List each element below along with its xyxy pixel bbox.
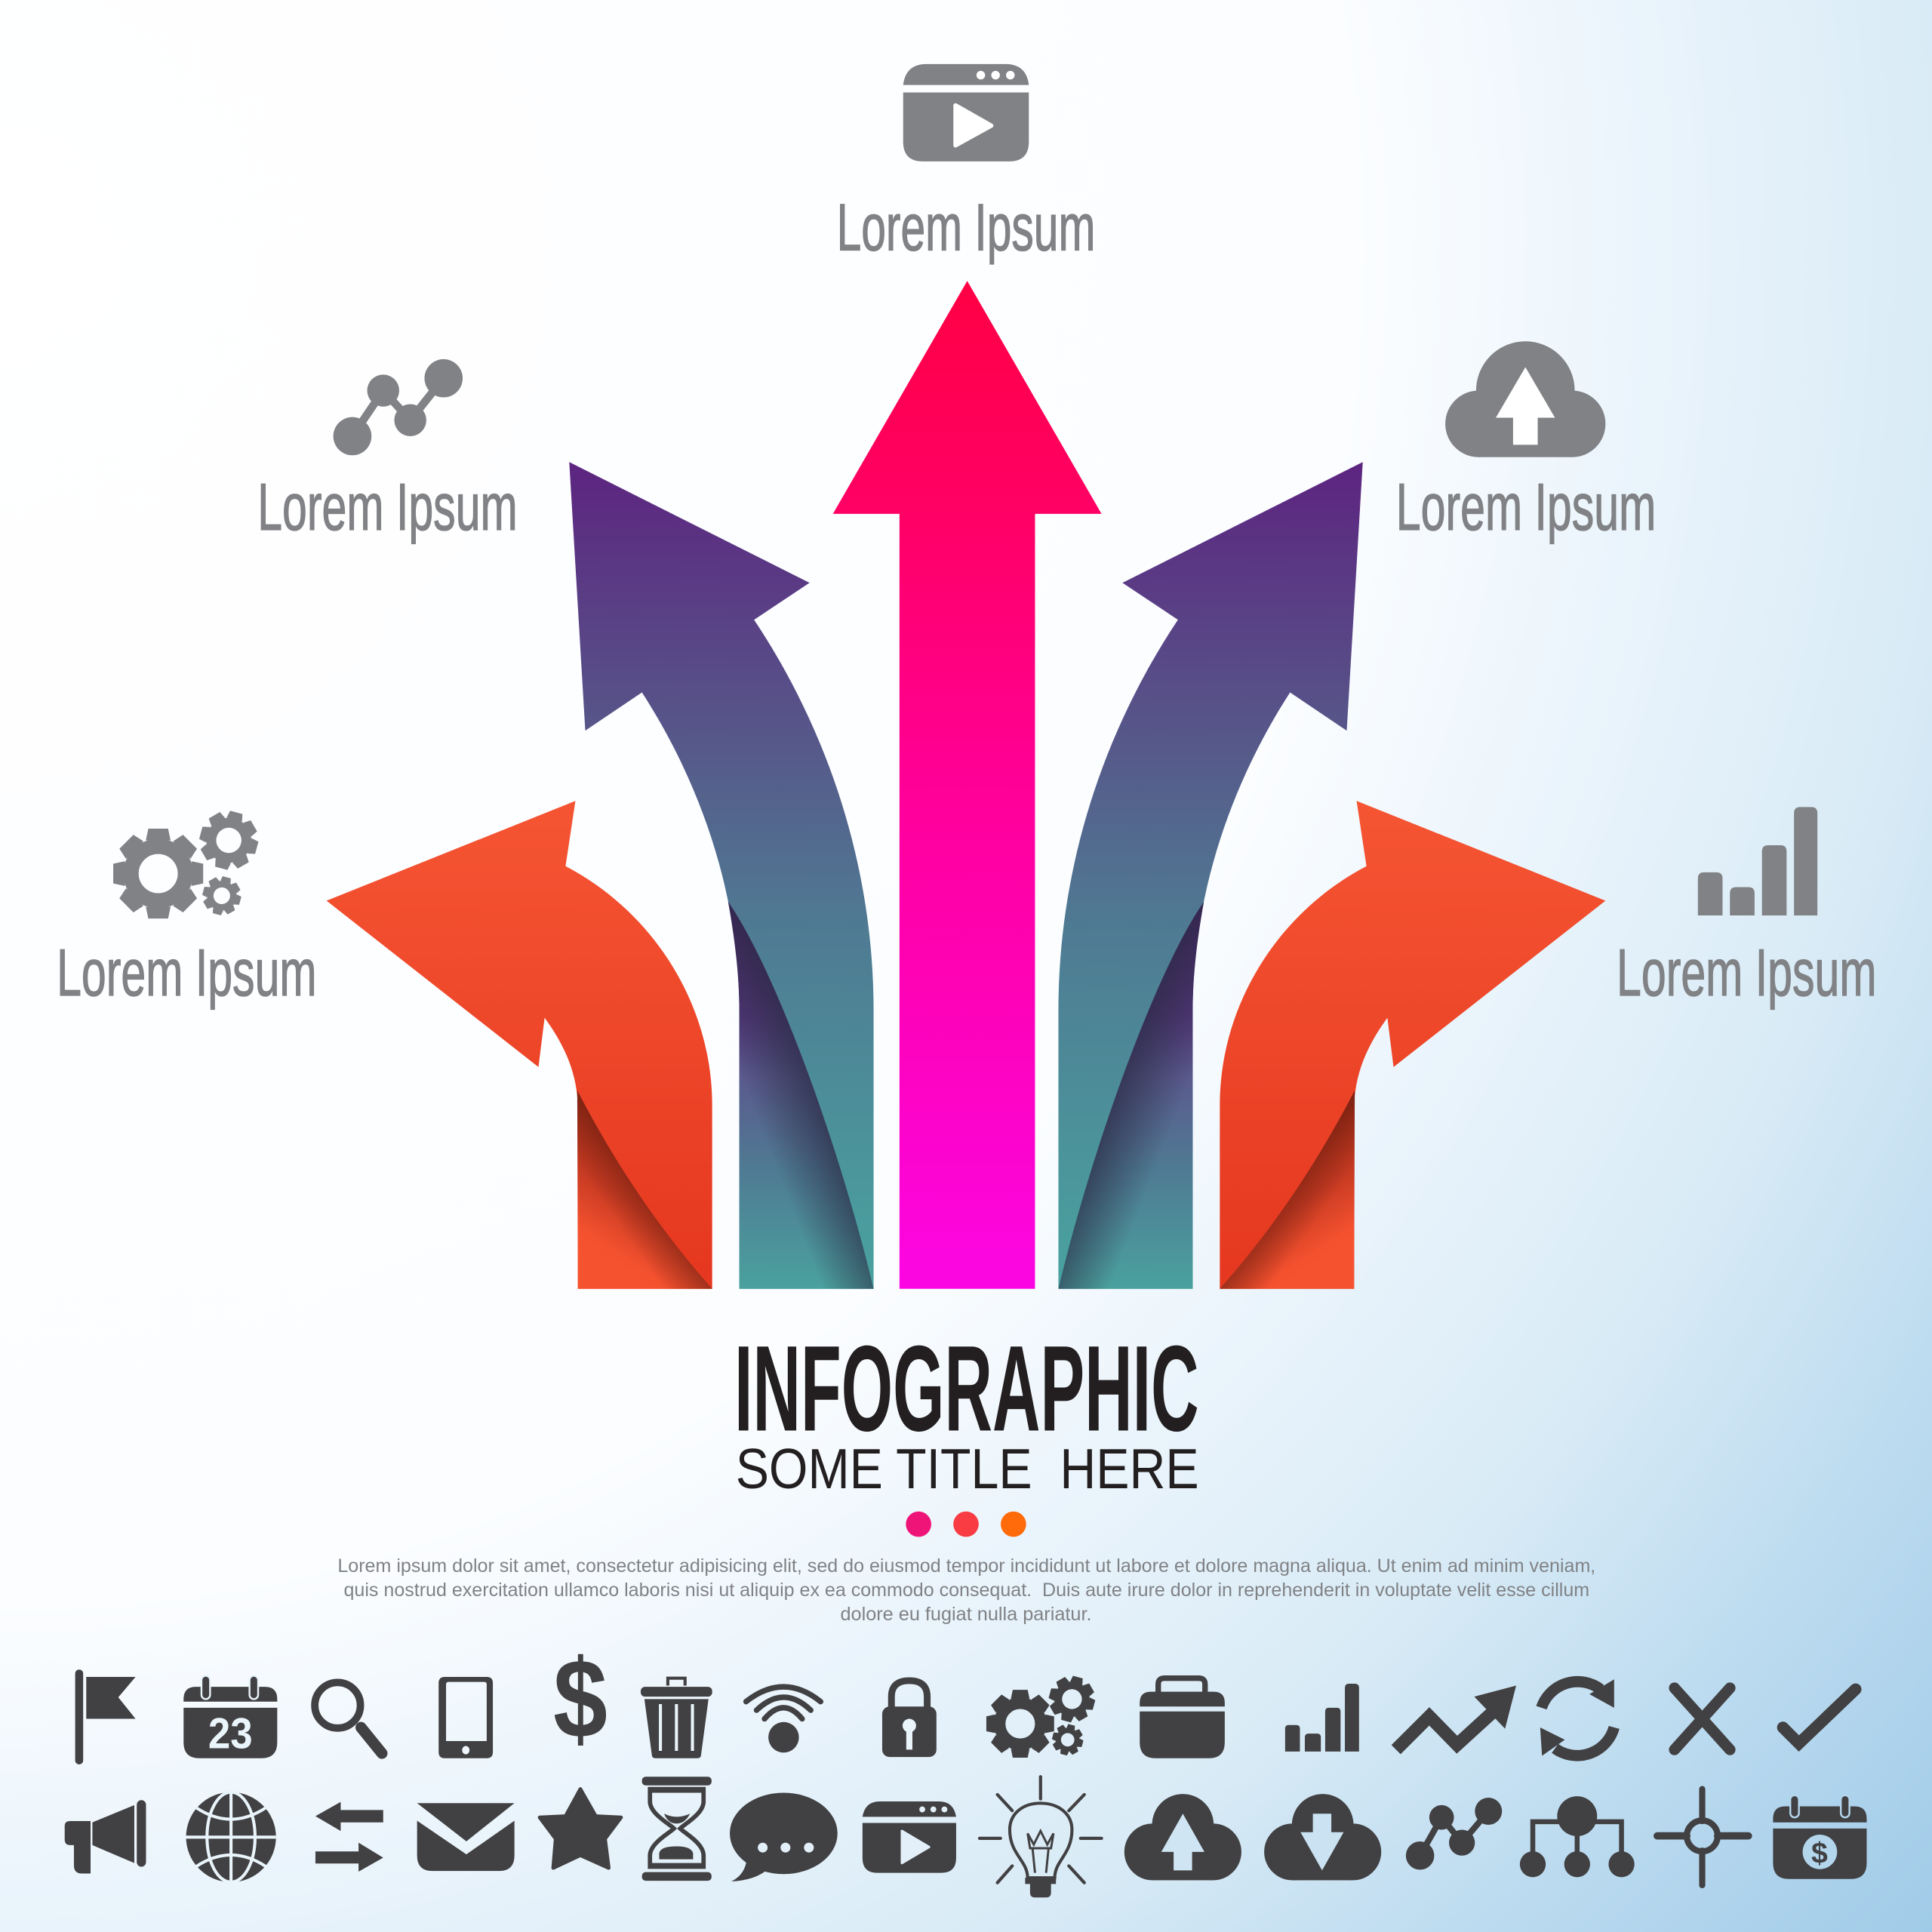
label: Lorem Ipsum — [837, 189, 1095, 264]
icon: trend arrow — [1396, 1685, 1516, 1749]
label: Lorem Ipsum — [1396, 469, 1656, 544]
icon: trash — [641, 1678, 712, 1758]
icon: check — [1783, 1689, 1856, 1743]
icon: speech bubble — [730, 1793, 838, 1881]
icon: small bars — [1285, 1684, 1359, 1752]
icon: globe — [186, 1792, 276, 1883]
label: Lorem Ipsum — [257, 469, 518, 544]
icon: cloud upload small — [1124, 1794, 1241, 1880]
callout: cloud, upper right — [1396, 341, 1656, 544]
callout: gears, left — [57, 804, 317, 1010]
icon: refresh — [1540, 1679, 1614, 1756]
icon: cloud download small — [1264, 1794, 1381, 1880]
callout: bars, right — [1617, 807, 1877, 1010]
decorative dots — [906, 1512, 1026, 1537]
icon: calendar 23: 23 — [208, 1710, 253, 1758]
icon: hierarchy — [1520, 1796, 1635, 1877]
icon: dollar: $ — [553, 1637, 608, 1761]
icon: nodes small — [1406, 1798, 1502, 1870]
body text: dolore eu fugiat nulla pariatur. — [840, 1604, 1092, 1625]
icon: envelope — [417, 1803, 515, 1871]
arrow: inner right purple — [1058, 462, 1363, 1289]
body text — [337, 1555, 1595, 1625]
subtitle: SOME TITLE HERE — [736, 1437, 1199, 1500]
icon: flag — [75, 1669, 136, 1764]
icon: briefcase — [1140, 1678, 1225, 1758]
body text: quis nostrud exercitation ullamco laboris nisi ut aliquip ex ea commodo consequat. Duis aute irure dolor in reprehenderit in voluptate velit esse cillum — [344, 1580, 1589, 1601]
icon: megaphone — [65, 1800, 146, 1873]
icon row 2 — [65, 1777, 1866, 1897]
icon: phone — [438, 1677, 493, 1758]
callout: video, top center — [837, 64, 1095, 264]
icon: hourglass — [642, 1777, 712, 1881]
body text: Lorem ipsum dolor sit amet, consectetur adipisicing elit, sed do eiusmod tempor incididunt ut labore et dolore magna aliqua. Ut enim ad minim veniam, — [337, 1555, 1595, 1577]
icon: wifi — [746, 1687, 820, 1752]
icon: gears small — [986, 1671, 1100, 1758]
icon: calendar dollar: $ — [1811, 1838, 1828, 1870]
icon: calendar 23 — [183, 1675, 277, 1758]
icon: light bulb — [980, 1777, 1102, 1897]
icon: magnifier — [315, 1682, 382, 1753]
arrows group — [327, 281, 1605, 1289]
icon: cloud upload — [1445, 341, 1605, 457]
arrow: outer left orange — [327, 801, 712, 1289]
label: Lorem Ipsum — [57, 935, 317, 1010]
icon: video small — [863, 1801, 956, 1873]
icon: gears — [113, 804, 264, 919]
icon: lock — [882, 1681, 937, 1757]
icon: video player — [903, 64, 1029, 162]
icon: bar signal — [1698, 807, 1817, 915]
callout: nodes, upper left — [257, 359, 518, 544]
arrow: outer right orange — [1220, 801, 1605, 1289]
icon: cross — [1675, 1688, 1730, 1749]
icon: calendar dollar — [1773, 1795, 1866, 1879]
title: INFOGRAPHIC — [734, 1321, 1199, 1457]
icon: connected nodes — [334, 359, 463, 455]
icon: star — [540, 1789, 621, 1868]
icon: exchange arrows — [315, 1802, 383, 1872]
arrow: center magenta — [833, 281, 1102, 1289]
icon row 1 — [75, 1637, 1856, 1764]
arrow: inner left purple — [569, 462, 874, 1289]
icon: crosshair — [1657, 1789, 1749, 1885]
